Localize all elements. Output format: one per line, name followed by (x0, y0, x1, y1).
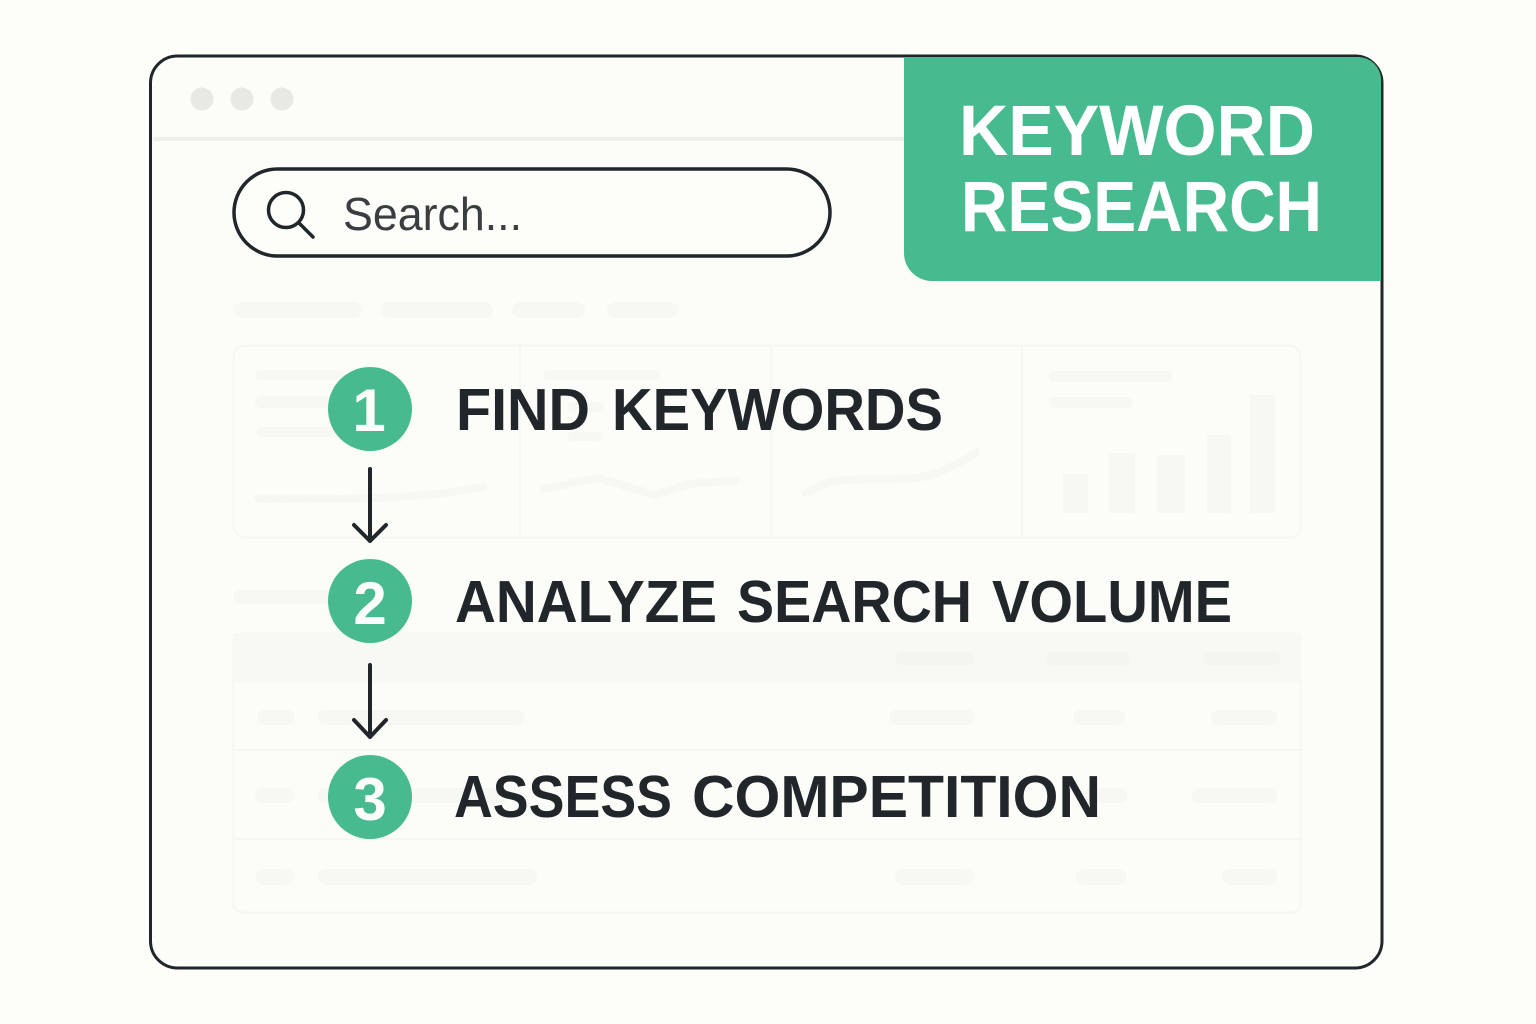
step 2 label: SEARCH (737, 569, 972, 635)
metric card 1 (255, 370, 483, 499)
step 2: analyze search volume (328, 559, 1232, 643)
step 1 label (456, 377, 943, 443)
window control dots (190, 88, 294, 110)
step 3 label: COMPETITION (692, 764, 1101, 830)
faded data table (233, 633, 1302, 912)
icon: magnifying glass (268, 192, 313, 237)
step 2 number badge (328, 559, 412, 643)
faded tab bars (234, 302, 678, 318)
step 3 label (454, 764, 1101, 830)
faded metrics panel (234, 346, 1300, 538)
metric card 2 (543, 370, 735, 495)
step 1 label: FIND (456, 377, 590, 443)
step 3 number badge (328, 755, 412, 839)
step 1 label: KEYWORDS (612, 377, 943, 443)
step 2 label: VOLUME (992, 569, 1232, 635)
step 2 number badge: 2 (353, 570, 387, 637)
search placeholder text: Search... (343, 188, 522, 240)
arrow: step 1 to step 2 (354, 469, 386, 541)
arrow: step 2 to step 3 (354, 665, 386, 737)
title banner: keyword research (904, 57, 1381, 281)
step 1: find keywords (328, 367, 943, 451)
step 1 number badge (328, 367, 412, 451)
step 1 number badge: 1 (352, 377, 386, 444)
step 3 label: ASSESS (454, 764, 672, 830)
search bar (234, 169, 830, 256)
banner heading line 1: KEYWORD (959, 92, 1315, 171)
metric card 4: bar chart (1049, 371, 1275, 513)
browser window frame (150, 56, 1382, 968)
faded table heading bar (233, 590, 333, 604)
banner heading line 2: RESEARCH (961, 168, 1322, 247)
step 2 label: ANALYZE (455, 569, 717, 635)
step 3: assess competition (328, 755, 1101, 839)
step 2 label (455, 569, 1232, 635)
step 3 number badge: 3 (353, 766, 387, 833)
metric card 3 (806, 452, 976, 493)
